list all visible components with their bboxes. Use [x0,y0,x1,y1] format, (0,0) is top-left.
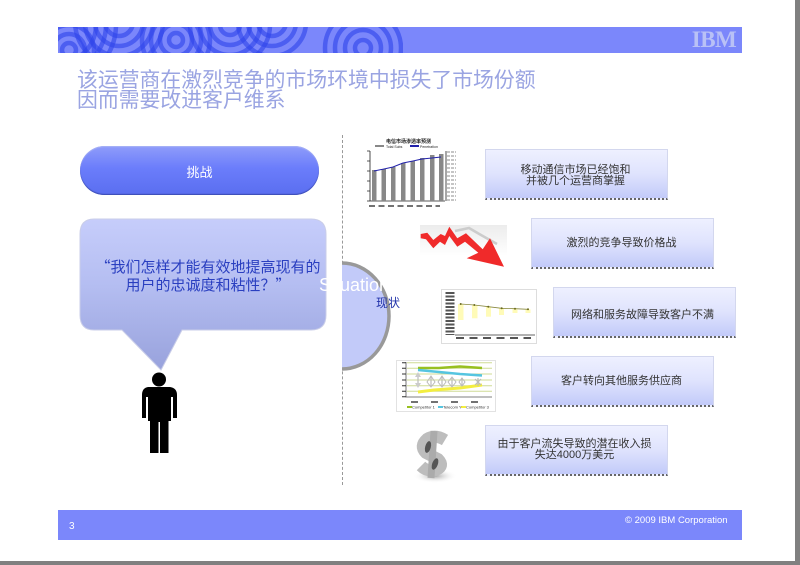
chart: competitor trends: Telecom Y [443,404,462,410]
icon: dollar sign [416,430,450,481]
situation half circle [342,261,391,371]
bubble quote text: 用户的忠诚度和粘性？” [125,274,290,295]
text box: service failures [553,287,736,338]
text box: saturated market: 移动通信市场已经饱和 [520,164,630,176]
footer bar [58,510,742,540]
text box: customers switching: 客户转向其他服务供应商 [561,374,682,386]
situation label chinese: 现状 [376,296,400,310]
copyright: © 2009 IBM Corporation [625,515,728,526]
icon: person [142,372,177,453]
chart: competitor trends [396,360,496,412]
chart: competitor trends: Competitor 1 [412,404,436,410]
chart: market penetration: Penetration [420,145,438,149]
chart: market penetration: Total Subs [386,145,403,149]
text box: revenue loss [485,425,668,476]
situation label english: Situation [319,275,389,295]
text box: price war: 激烈的竞争导致价格战 [566,236,676,248]
title: 因而需要改进客户维系 [77,89,285,112]
text box: service failures: 网络和服务故障导致客户不满 [571,308,714,320]
chart: competitor trends: Competitor 3 [466,404,490,410]
title [77,69,536,112]
speech bubble [80,218,326,371]
panel: challenge pill: 挑战 [186,165,212,180]
gray bottom edge [0,561,800,565]
text box: saturated market: 并被几个运营商掌握 [526,174,625,186]
chart: declining line [441,289,537,344]
page number: 3 [69,521,75,532]
panel: challenge pill [80,146,319,195]
text box: saturated market [485,149,668,200]
chart: market penetration [367,138,456,207]
bubble quote text [95,256,320,295]
text box: revenue loss: 失达4000万美元 [535,449,614,461]
bubble quote text: “我们怎样才能有效地提高现有的 [95,256,320,277]
header banner with concentric circles [58,27,742,53]
icon: falling red arrow [420,225,507,267]
title: 该运营商在激烈竞争的市场环境中损失了市场份额 [77,69,536,92]
dashed divider [342,135,343,485]
text box: customers switching [531,356,714,407]
text box: price war [531,218,714,269]
IBM logo: IBM [692,27,736,52]
text box: revenue loss: 由于客户流失导致的潜在收入损 [498,438,652,450]
chart: market penetration: 电信市场渗透率预测 [386,138,431,145]
gray right edge [795,0,800,565]
